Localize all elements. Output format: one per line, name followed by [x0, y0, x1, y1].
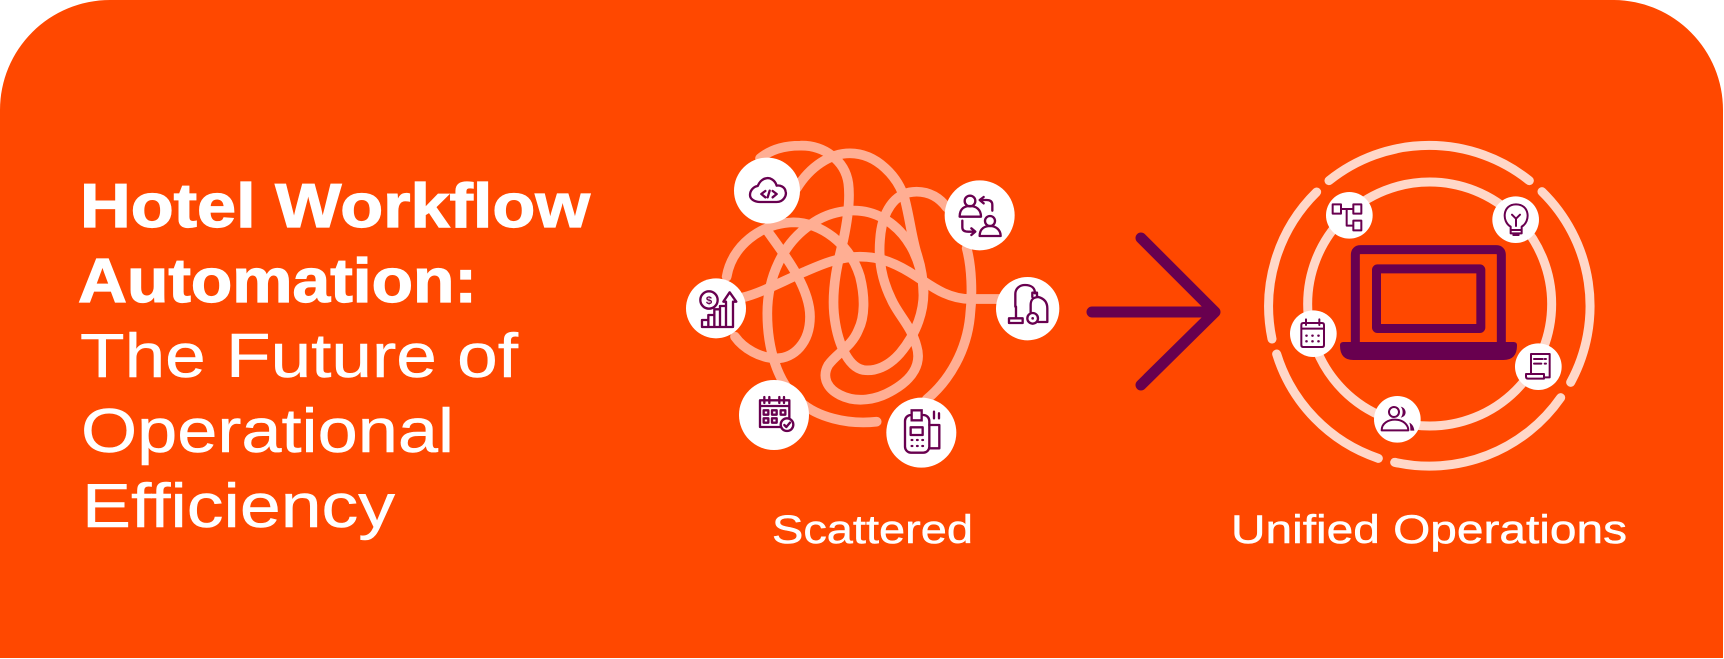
icon: calendar check: [739, 380, 809, 450]
icon: cloud code: [734, 158, 800, 224]
title: Efficiency: [82, 472, 395, 541]
scattered tangle diagram: [686, 146, 1059, 468]
icon: vacuum cleaner: [996, 277, 1059, 340]
title: Hotel Workflow: [80, 172, 591, 241]
icon: people swap: [945, 180, 1015, 250]
icon: flow chart: [1326, 192, 1373, 239]
tangled line: [727, 146, 1000, 422]
inner ring: [1308, 182, 1552, 426]
title: Operational: [81, 397, 454, 466]
label: Scattered: Scattered: [772, 508, 973, 552]
icon: light bulb: [1492, 196, 1539, 243]
icon: money growth: [686, 278, 746, 338]
icon: payment terminal: [886, 398, 956, 468]
title: The Future of: [80, 322, 519, 391]
arrow: [1092, 238, 1215, 385]
unified rings diagram: [1269, 145, 1590, 466]
icon: calendar: [1290, 310, 1337, 357]
laptop: [1340, 250, 1517, 360]
label: Unified Operations: Unified Operations: [1231, 508, 1627, 552]
title: Automation:: [78, 247, 477, 316]
icon: receipt: [1515, 343, 1562, 390]
icon: money growth: $: [706, 295, 713, 307]
icon: team: [1374, 396, 1421, 443]
title: [78, 172, 591, 541]
outer ring segments: [1269, 145, 1590, 466]
